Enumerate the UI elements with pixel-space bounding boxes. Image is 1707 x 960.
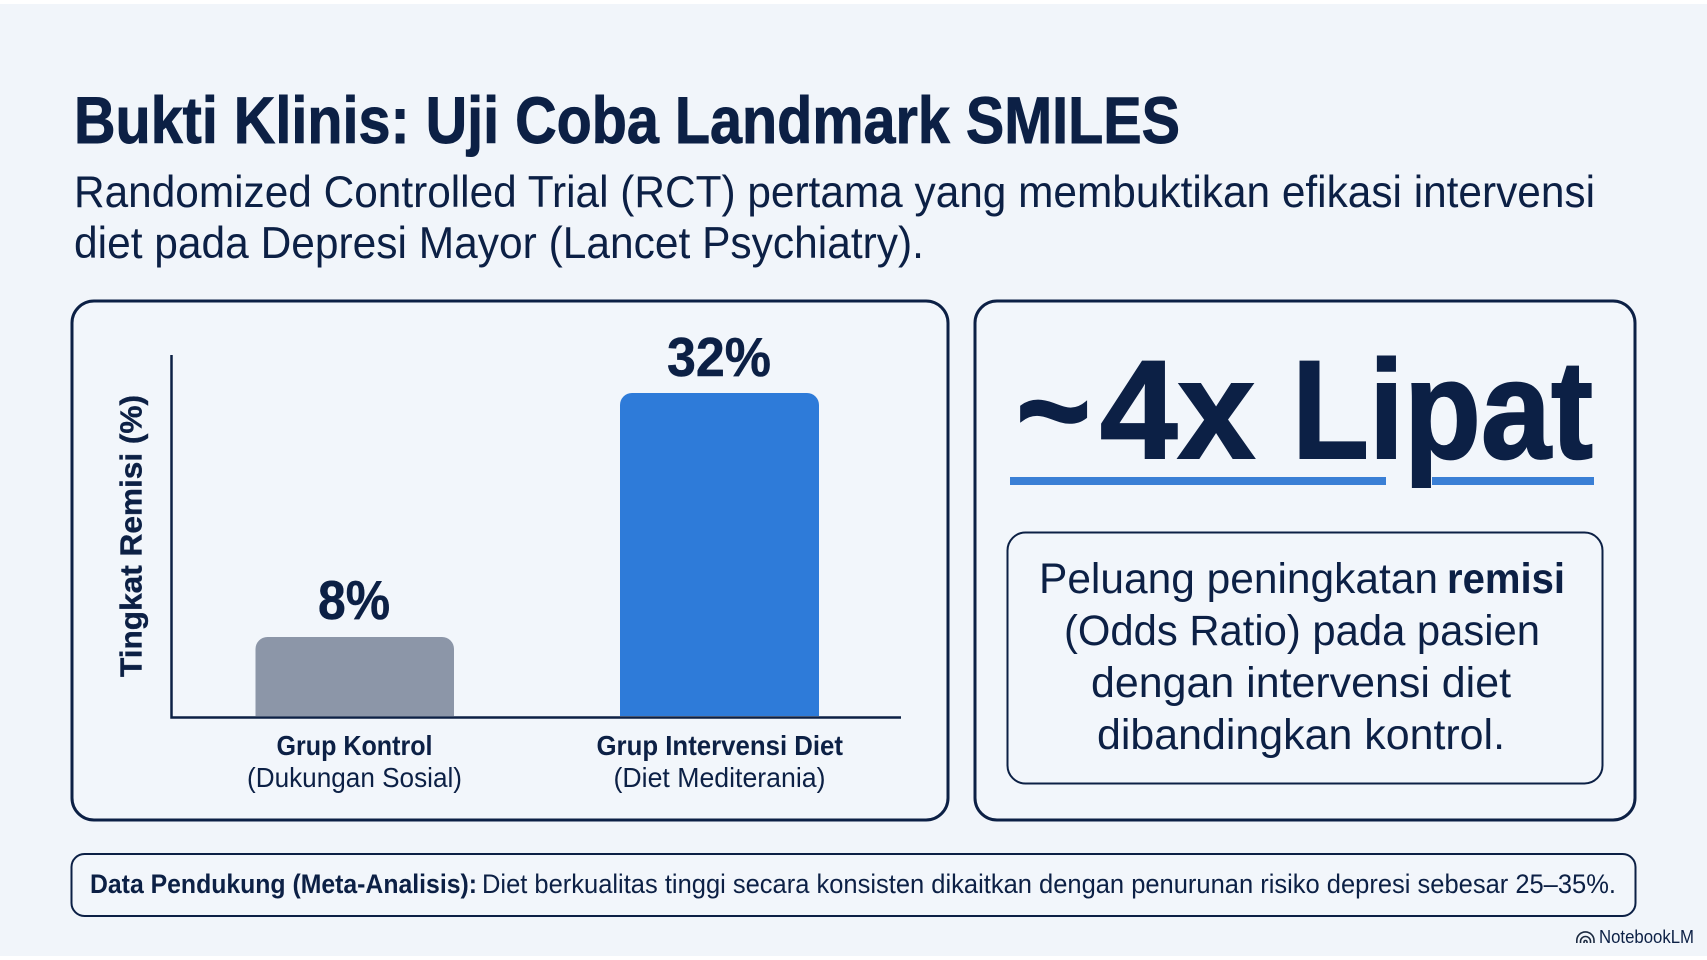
panel frame <box>72 301 948 820</box>
value: 32%: 32% <box>667 326 771 388</box>
label: control group: Grup Kontrol <box>276 730 432 761</box>
supporting data bar: Data Pendukung (Meta-Analisis): <box>90 869 477 899</box>
label: diet group: (Diet Mediterania) <box>614 762 826 793</box>
supporting data bar <box>72 854 1636 916</box>
description box: dengan intervensi diet <box>1091 660 1511 707</box>
description box: (Odds Ratio) pada pasien <box>1064 608 1540 655</box>
title: Bukti Klinis: Uji Coba Landmark SMILES <box>74 83 1180 157</box>
panel: odds ratio <box>975 301 1635 820</box>
label: control group: (Dukungan Sosial) <box>247 762 462 793</box>
value: 8%: 8% <box>318 569 390 631</box>
description box: dibandingkan kontrol. <box>1097 712 1505 759</box>
y axis label: Tingkat Remisi (%) <box>114 395 148 677</box>
description box: Peluang peningkatan <box>1039 556 1438 603</box>
description box <box>1008 532 1602 784</box>
big stat: 4x <box>1100 331 1255 488</box>
stat underline <box>1010 477 1594 485</box>
subtitle: Randomized Controlled Trial (RCT) pertama yang membuktikan efikasi intervensi <box>74 168 1595 217</box>
bar: control group <box>256 637 454 716</box>
chart axes <box>172 355 901 718</box>
watermark: NotebookLM: NotebookLM <box>1599 926 1694 947</box>
subtitle: diet pada Depresi Mayor (Lancet Psychiatry). <box>74 219 924 268</box>
description box: remisi <box>1447 556 1565 603</box>
label: control group <box>247 730 462 793</box>
icon: NotebookLM logo <box>1577 932 1594 943</box>
panel frame <box>975 301 1635 820</box>
big stat: Lipat <box>1292 331 1593 488</box>
supporting data bar: Diet berkualitas tinggi secara konsisten dikaitkan dengan penurunan risiko depresi sebesar 25–35%. <box>482 869 1616 899</box>
label: diet group <box>596 730 843 793</box>
bar: diet group <box>620 393 819 716</box>
big stat <box>1016 331 1593 488</box>
panel: bar chart <box>72 301 948 820</box>
big stat: ~ <box>1016 331 1091 488</box>
label: diet group: Grup Intervensi Diet <box>596 730 843 761</box>
subtitle <box>74 168 1595 268</box>
